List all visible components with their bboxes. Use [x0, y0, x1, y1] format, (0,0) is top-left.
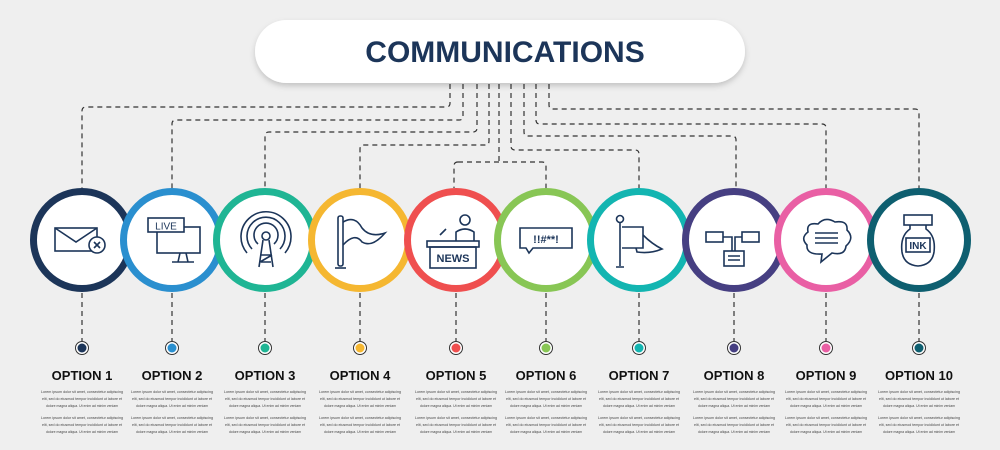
option 6: OPTION 6 — [516, 368, 576, 383]
icon: swear bubble: !!#**! — [533, 234, 559, 246]
option 8: OPTION 8 — [704, 368, 764, 383]
description texts: elit, sed do eiusmod tempor incididunt ut labore et — [42, 397, 122, 401]
icon: news desk — [427, 215, 479, 268]
option 10 — [870, 192, 968, 383]
option 4: OPTION 4 — [330, 368, 391, 383]
icon: ink bottle — [902, 215, 934, 266]
icon: ink bottle: INK — [909, 241, 927, 252]
icon: envelope x — [55, 228, 105, 253]
icon: antenna — [241, 212, 291, 267]
option 9: OPTION 9 — [796, 368, 856, 383]
icon: chat network — [706, 232, 759, 266]
description texts: Lorem ipsum dolor sit amet, consectetur adipiscing — [41, 390, 123, 394]
option 3: OPTION 3 — [235, 368, 295, 383]
description texts: Lorem ipsum dolor sit amet, consectetur adipiscing — [41, 416, 123, 420]
description texts: dolore magna aliqua. Ut enim ad minim veniam — [46, 430, 118, 434]
icon: waving flag — [335, 216, 385, 268]
option 3 — [216, 192, 314, 383]
option 1 — [34, 192, 130, 383]
option 10: OPTION 10 — [885, 368, 953, 383]
option 1: OPTION 1 — [52, 368, 112, 383]
icon: cloud bubble — [804, 219, 851, 262]
description texts — [41, 390, 960, 434]
option 4 — [312, 192, 408, 383]
icon: news desk: NEWS — [436, 253, 470, 265]
option 5: OPTION 5 — [426, 368, 486, 383]
description texts: elit, sed do eiusmod tempor incididunt ut labore et — [42, 423, 122, 427]
icon: flag — [616, 216, 662, 267]
option 7 — [590, 192, 688, 383]
option 2: OPTION 2 — [142, 368, 202, 383]
icon: live tv: LIVE — [155, 222, 177, 232]
option 7: OPTION 7 — [609, 368, 669, 383]
title — [255, 20, 745, 83]
connector lines — [82, 84, 919, 188]
option 9 — [778, 192, 874, 383]
icon: swear bubble — [520, 228, 572, 253]
icon: live tv — [148, 218, 200, 262]
description texts: dolore magna aliqua. Ut enim ad minim veniam — [46, 404, 118, 408]
option 5 — [408, 192, 504, 383]
title: COMMUNICATIONS — [365, 36, 645, 69]
option 6 — [498, 192, 594, 383]
option 8 — [686, 192, 782, 383]
option 2 — [124, 192, 220, 383]
